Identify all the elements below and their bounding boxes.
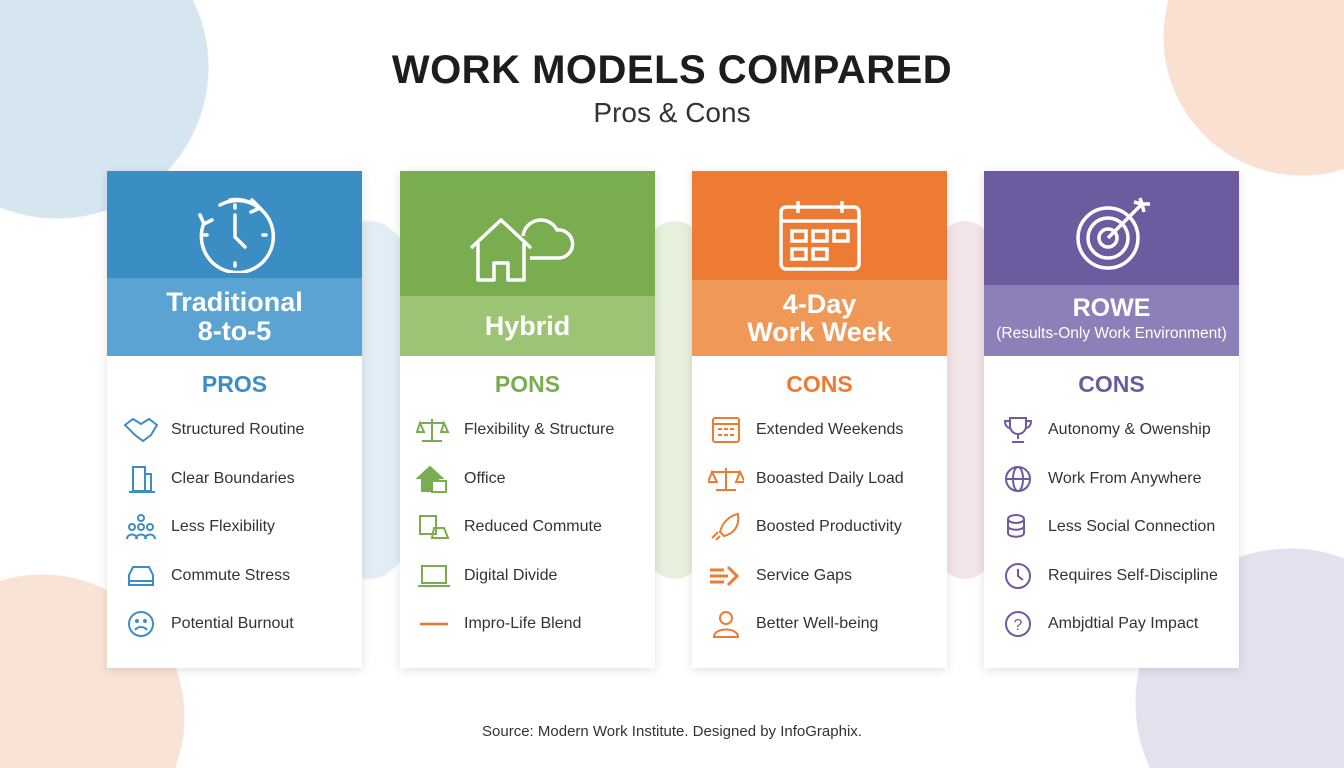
item	[1005, 563, 1218, 589]
item	[712, 417, 903, 443]
item: Boosted Productivity	[756, 518, 902, 535]
item: Reduced Commute	[464, 518, 602, 535]
subtitle: Pros & Cons	[593, 97, 751, 128]
item: Flexibility & Structure	[464, 421, 614, 438]
item: Extended Weekends	[756, 421, 903, 438]
heading: hybrid	[400, 296, 655, 356]
item: Better Well-being	[756, 615, 878, 632]
item	[1005, 611, 1198, 637]
section: cons: CONS	[786, 371, 853, 397]
panel: hybrid	[400, 171, 655, 668]
panel: rowe	[984, 171, 1239, 668]
item: Work From Anywhere	[1048, 470, 1202, 487]
item	[713, 611, 878, 638]
heading: hybrid: Hybrid	[485, 310, 570, 340]
section: cons: CONS	[1078, 371, 1145, 397]
item: Digital Divide	[464, 567, 557, 584]
item: Service Gaps	[756, 567, 852, 584]
item: Requires Self-Discipline	[1048, 567, 1218, 584]
panel: 4-day	[692, 171, 947, 668]
item: Commute Stress	[171, 567, 290, 584]
heading: rowe: (Results-Only Work Environment)	[996, 324, 1227, 342]
heading: 4-day	[692, 280, 947, 356]
item: Office	[464, 470, 506, 487]
icon: calendar	[779, 201, 861, 271]
item: Booasted Daily Load	[756, 470, 904, 487]
item	[124, 418, 304, 442]
item	[126, 514, 275, 539]
section: pros: PROS	[202, 371, 267, 397]
item: Structured Routine	[171, 421, 304, 438]
icon: target	[1076, 198, 1150, 270]
item: Less Social Connection	[1048, 518, 1215, 535]
item	[418, 565, 557, 587]
item: Ambjdtial Pay Impact	[1048, 615, 1198, 632]
item	[710, 566, 852, 586]
panel: traditional	[107, 171, 362, 668]
icon: clock	[198, 198, 276, 273]
item	[1004, 417, 1211, 443]
heading: 4-day: Work Week	[747, 317, 892, 347]
item	[129, 466, 295, 493]
footer source: Source: Modern Work Institute. Designed by InfoGraphix.	[482, 723, 862, 740]
item: Less Flexibility	[171, 518, 275, 535]
item: Clear Boundaries	[171, 470, 295, 487]
item: Impro-Life Blend	[464, 615, 581, 632]
item	[1005, 466, 1202, 492]
icon: house cloud	[470, 218, 574, 282]
item	[128, 611, 294, 637]
item	[1007, 514, 1215, 538]
item	[708, 468, 904, 491]
item: Autonomy & Owenship	[1048, 421, 1211, 438]
item	[128, 566, 290, 586]
heading: rowe	[984, 285, 1239, 356]
item	[711, 512, 902, 541]
heading: traditional	[107, 278, 362, 356]
heading: traditional: Traditional	[166, 287, 303, 317]
item: ?	[1014, 617, 1023, 634]
title: WORK MODELS COMPARED	[392, 48, 952, 92]
heading: 4-day: 4-Day	[783, 289, 856, 319]
heading: rowe: ROWE	[1073, 294, 1150, 322]
item: Potential Burnout	[171, 615, 294, 632]
section: pons: PONS	[495, 371, 560, 397]
item	[416, 419, 614, 442]
item	[416, 466, 506, 493]
item	[419, 515, 602, 539]
heading: traditional: 8-to-5	[198, 316, 271, 346]
